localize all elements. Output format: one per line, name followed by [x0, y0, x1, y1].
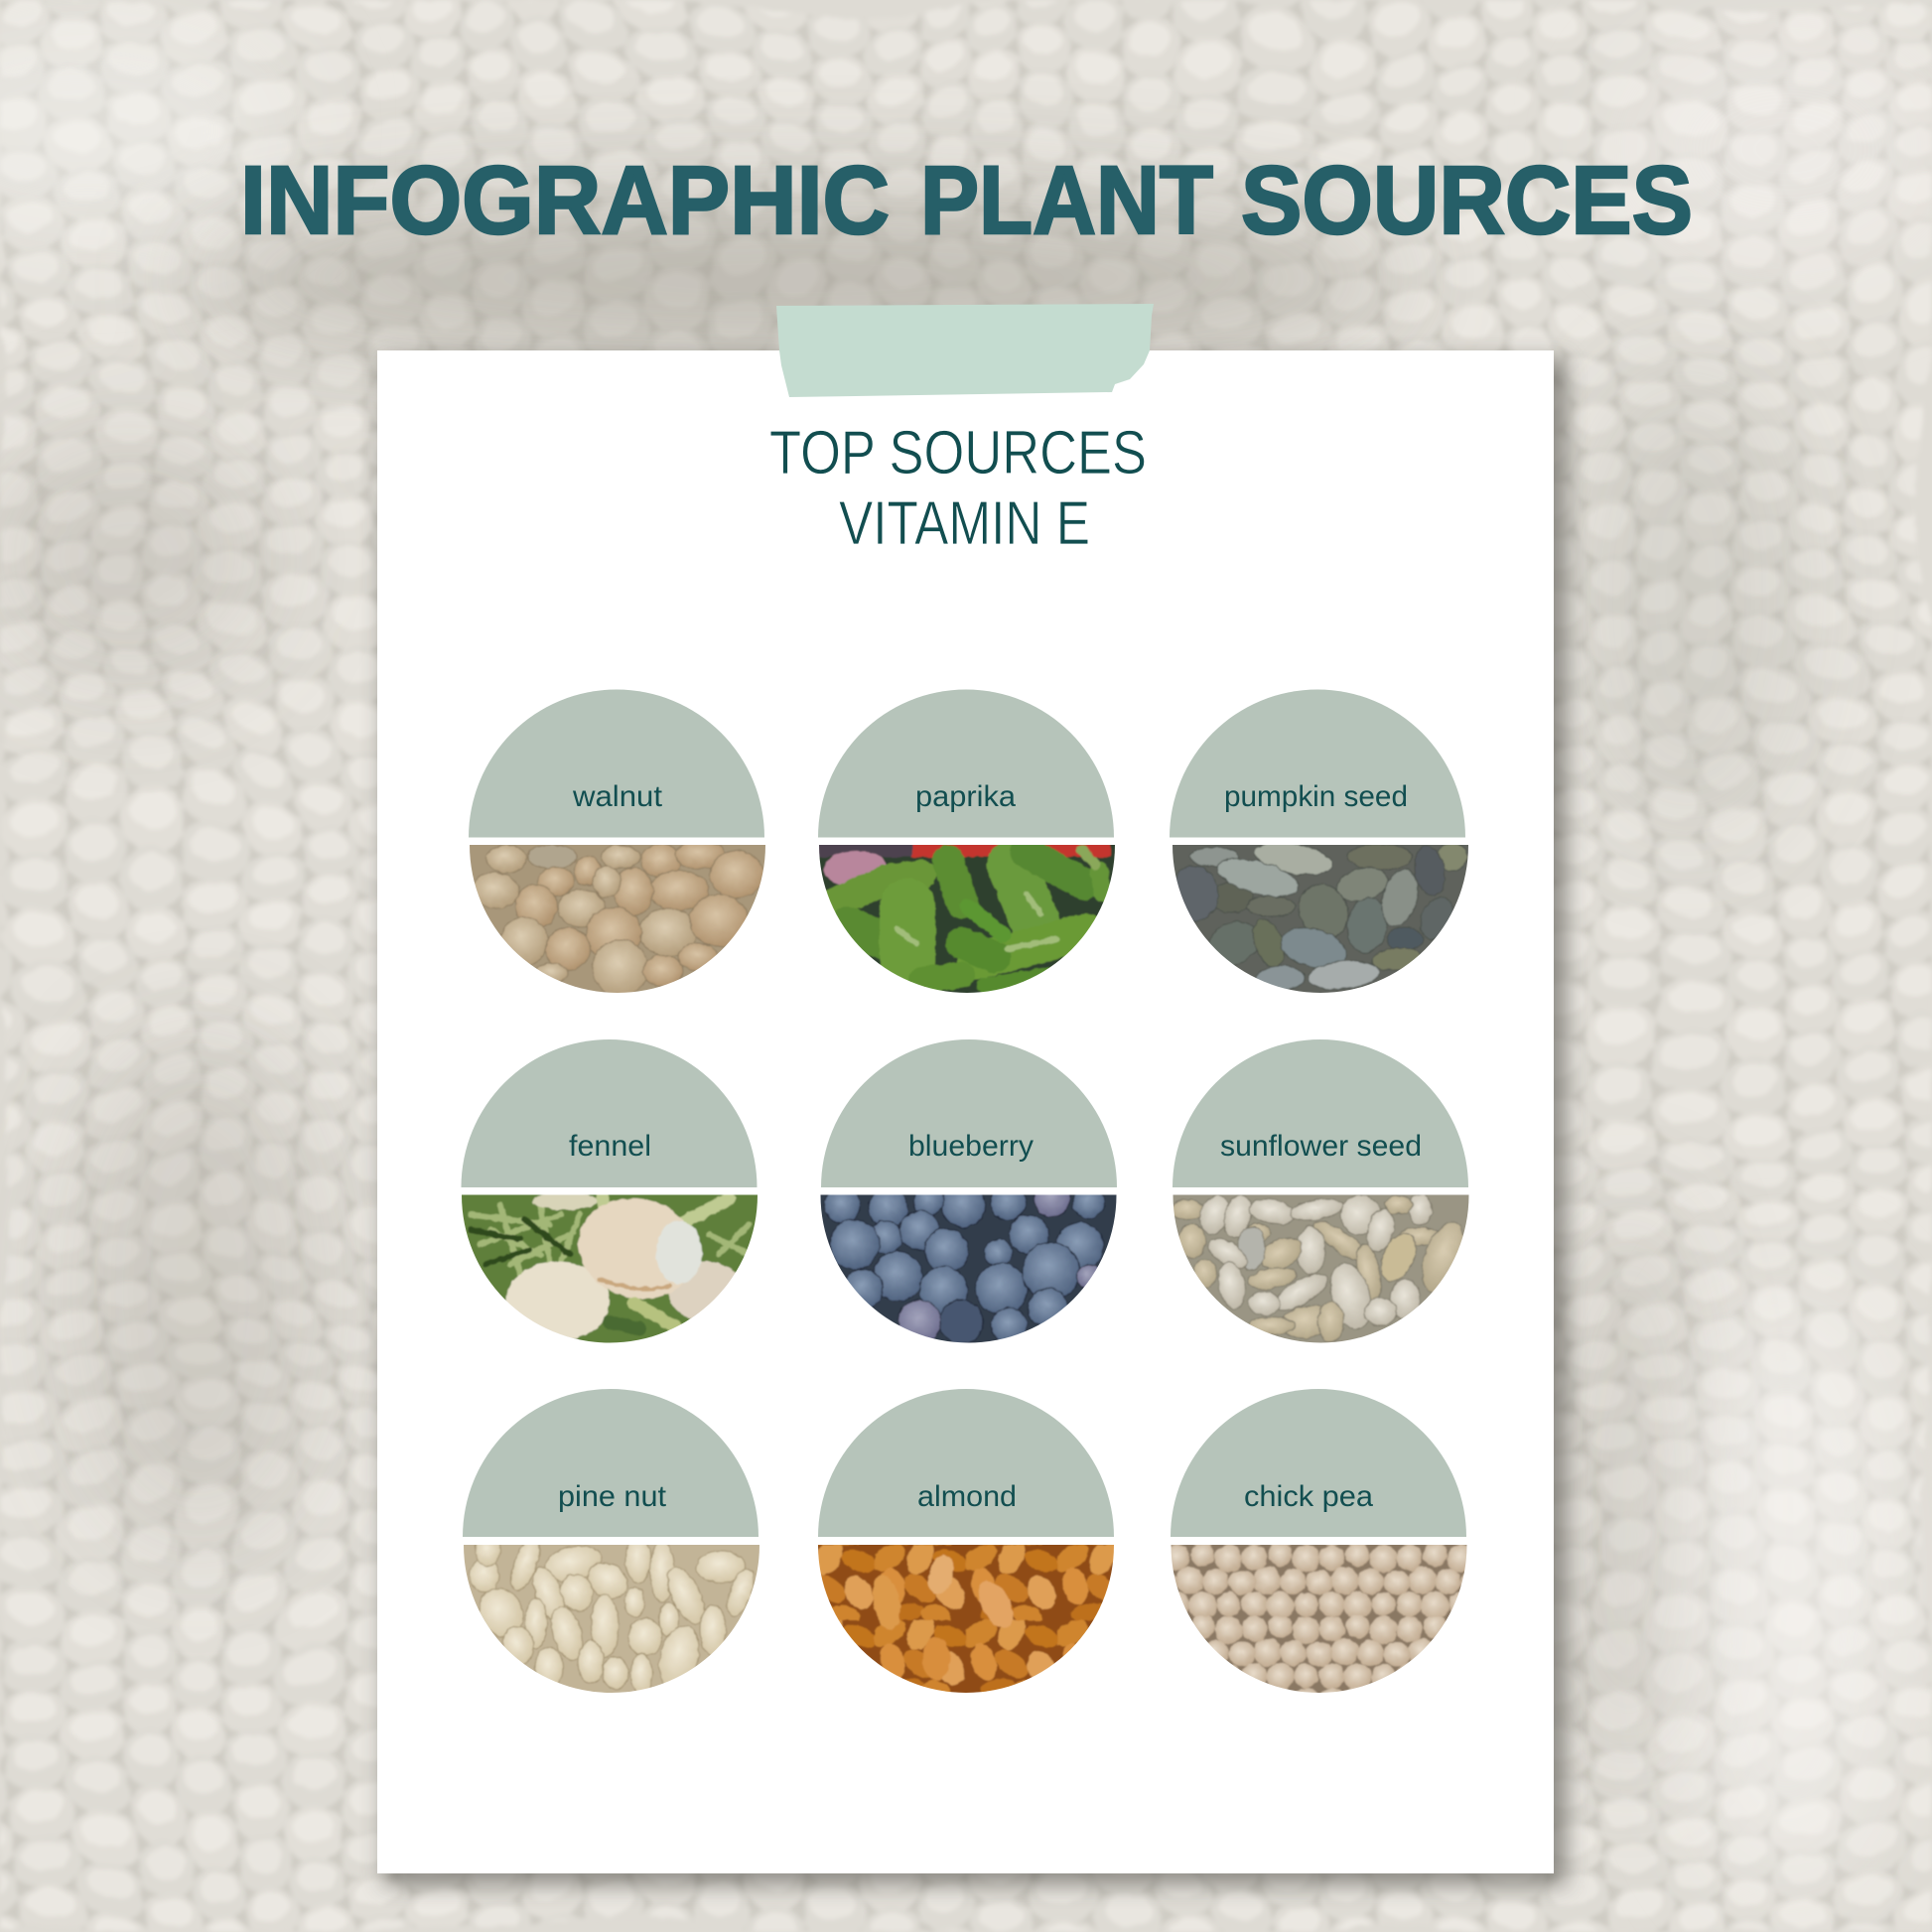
- main title: [240, 146, 1693, 254]
- subtitle: VITAMIN E: [839, 489, 1090, 558]
- card: pumpkin seed: [1167, 689, 1474, 998]
- card: blueberry: blueberry: [908, 1130, 1034, 1163]
- washi tape: [776, 304, 1154, 397]
- main title: INFOGRAPHIC: [240, 146, 890, 254]
- main title: SOURCES: [1241, 146, 1693, 254]
- subtitle: [769, 419, 1147, 558]
- card: pine nut: pine nut: [558, 1480, 667, 1513]
- main title: PLANT: [920, 146, 1213, 254]
- card: sunflower seed: [1168, 1039, 1475, 1348]
- card: sunflower seed: sunflower seed: [1220, 1130, 1422, 1163]
- card: walnut: [464, 689, 771, 998]
- card: pine nut: [458, 1389, 765, 1698]
- card: almond: [812, 1389, 1120, 1698]
- subtitle: TOP SOURCES: [769, 419, 1147, 487]
- card: blueberry: [814, 1039, 1122, 1348]
- card: fennel: fennel: [569, 1130, 651, 1163]
- card: pumpkin seed: pumpkin seed: [1224, 780, 1408, 813]
- card: chick pea: [1166, 1389, 1473, 1698]
- card: paprika: paprika: [915, 780, 1016, 813]
- card: chick pea: chick pea: [1244, 1480, 1373, 1513]
- paper shadow: [383, 358, 1567, 1885]
- card: paprika: [813, 689, 1121, 998]
- paper panel: [377, 350, 1554, 1873]
- card: fennel: [456, 1039, 763, 1348]
- card: walnut: walnut: [572, 780, 663, 813]
- card: almond: almond: [917, 1480, 1017, 1513]
